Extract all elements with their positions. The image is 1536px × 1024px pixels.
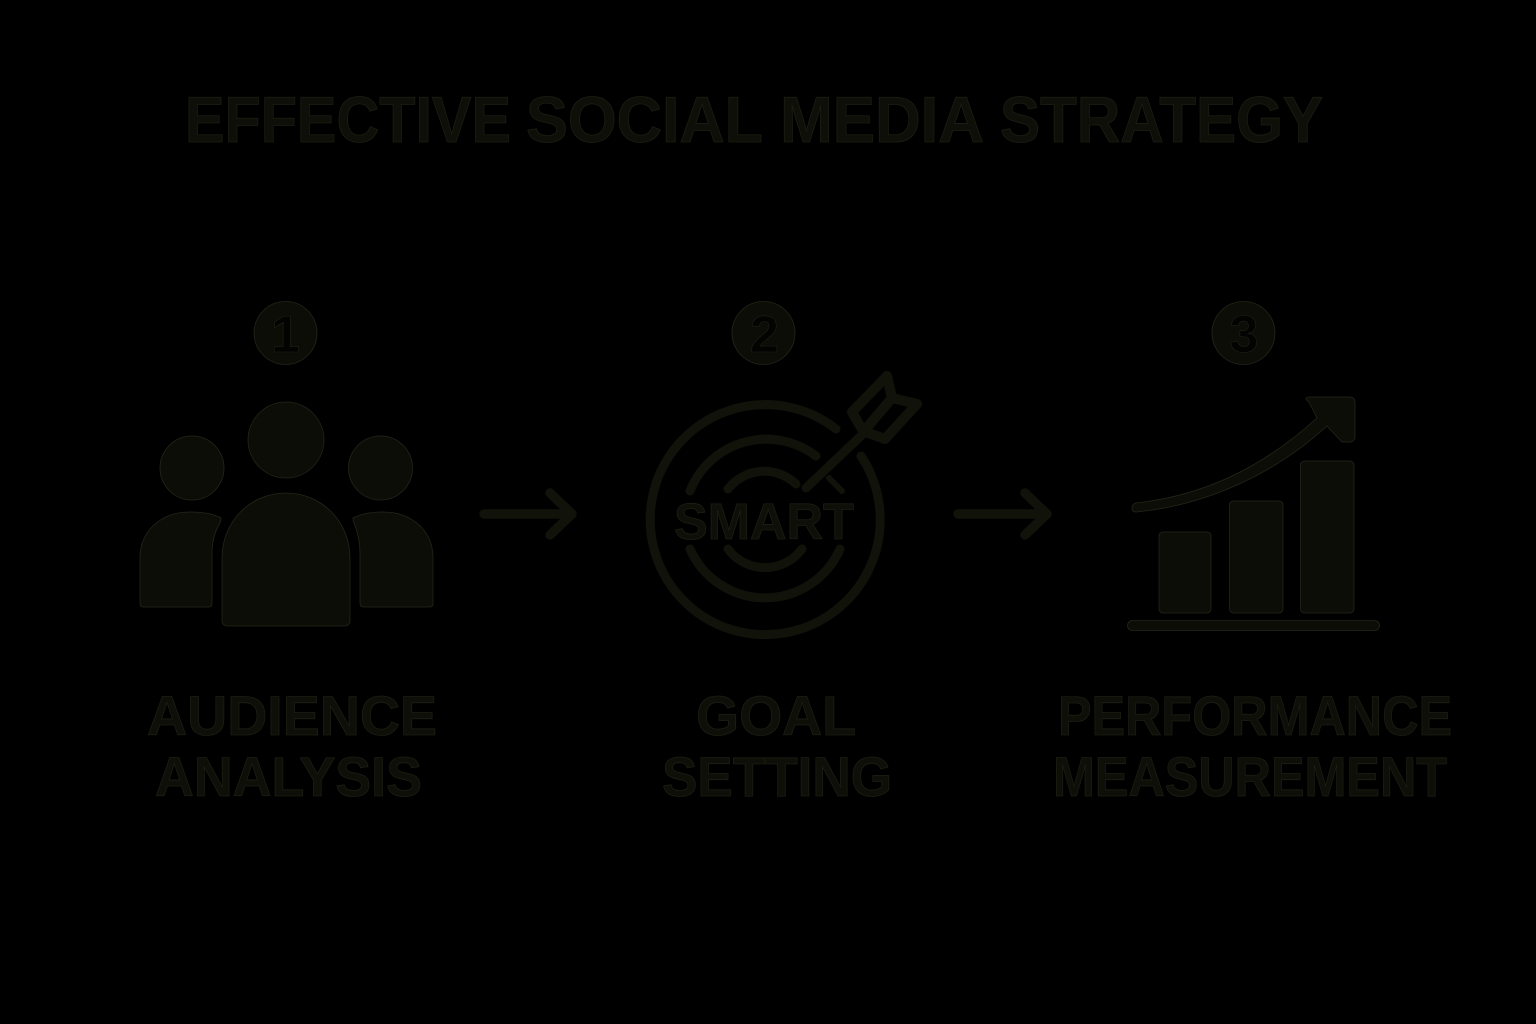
trend arrow bbox=[1132, 397, 1355, 512]
icon: SMART target with dart: SMART bbox=[674, 493, 854, 550]
icon: growth bar chart bbox=[1128, 397, 1380, 630]
step 2 panel: goal setting bbox=[650, 302, 917, 808]
number badge 2 bbox=[732, 302, 795, 364]
step 2 label: SETTING bbox=[662, 745, 892, 808]
step 1 label: AUDIENCE bbox=[147, 684, 437, 747]
baseline bbox=[1128, 620, 1380, 630]
title bbox=[185, 83, 1323, 156]
step 3 panel: performance measurement bbox=[1053, 302, 1452, 808]
step 3 label: MEASUREMENT bbox=[1053, 745, 1447, 808]
title: MEDIA bbox=[780, 83, 984, 156]
icon: SMART target with dart bbox=[650, 376, 917, 635]
title: SOCIAL bbox=[526, 83, 763, 156]
step 1 panel: audience analysis bbox=[140, 302, 437, 808]
title: STRATEGY bbox=[1000, 83, 1323, 156]
step 1 label bbox=[147, 684, 437, 808]
number badge 1 bbox=[254, 302, 317, 364]
step 2 label: GOAL bbox=[696, 684, 856, 747]
arrow: step 2 to step 3 bbox=[958, 493, 1047, 535]
step 1 label: ANALYSIS bbox=[155, 745, 422, 808]
arrow: step 1 to step 2 bbox=[484, 493, 572, 535]
number badge 1: 1 bbox=[271, 306, 300, 364]
number badge 3 bbox=[1212, 302, 1275, 364]
step 3 label bbox=[1053, 684, 1452, 808]
title: EFFECTIVE bbox=[185, 83, 511, 156]
number badge 3: 3 bbox=[1230, 306, 1258, 364]
bars bbox=[1159, 461, 1354, 613]
step 2 label bbox=[662, 684, 892, 808]
icon: audience group bbox=[140, 402, 433, 626]
step 3 label: PERFORMANCE bbox=[1058, 684, 1452, 747]
number badge 2: 2 bbox=[750, 306, 779, 364]
